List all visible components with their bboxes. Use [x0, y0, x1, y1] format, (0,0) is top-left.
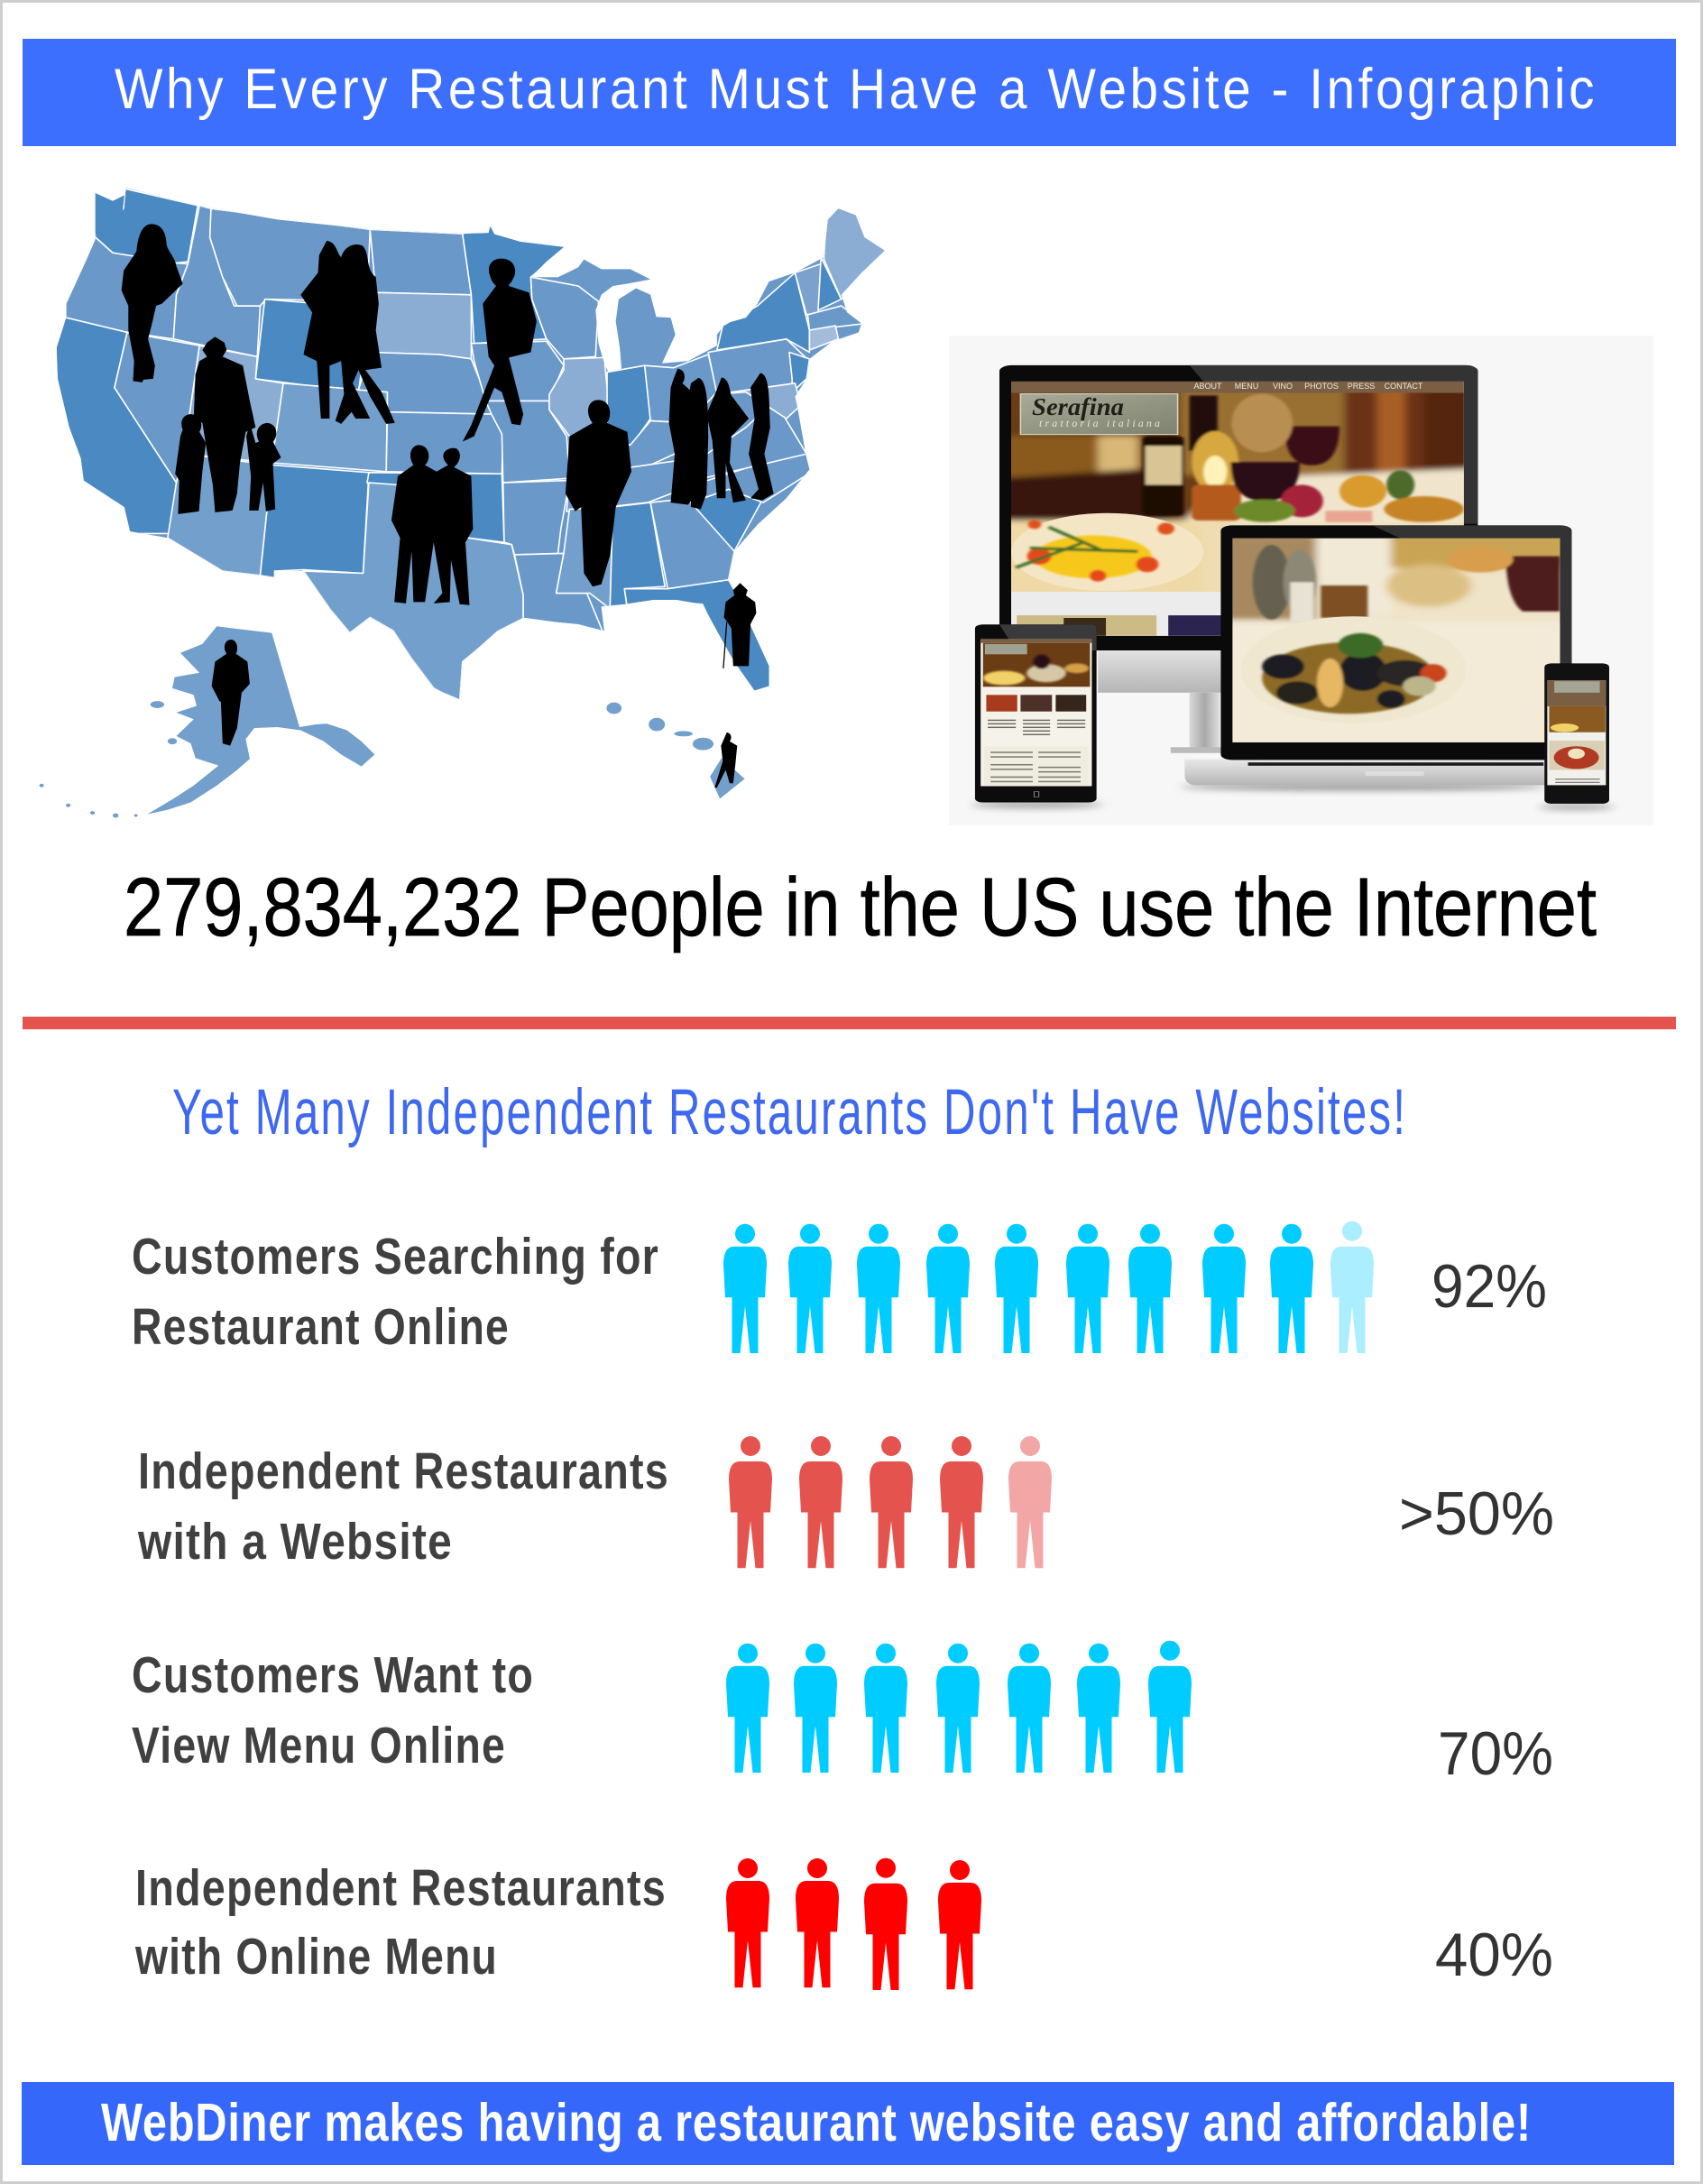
value: 92% [1431, 1252, 1547, 1321]
silhouette: two men [391, 445, 473, 605]
divider bar [23, 1017, 1676, 1029]
silhouette: walker, Hawaii [714, 733, 737, 788]
responsive devices mockup [962, 364, 1624, 816]
silhouette: woman, Pacific Northwest [122, 224, 183, 382]
monitor nav labels [1193, 382, 1423, 391]
US map with people silhouettes [29, 180, 897, 817]
silhouette: woman walking [463, 259, 537, 441]
footer banner [22, 2082, 1674, 2165]
label: View Menu Online [132, 1717, 506, 1774]
restaurant logo text: trattoria italiana [1039, 417, 1160, 429]
label: Customers Searching for [132, 1228, 659, 1286]
silhouette: group of four, east coast [669, 369, 774, 509]
monitor nav labels: PRESS [1348, 382, 1375, 391]
monitor nav labels: CONTACT [1385, 382, 1423, 391]
silhouette: parent with two children [175, 336, 281, 514]
label: with Online Menu [134, 1928, 498, 1986]
silhouette: two women [300, 241, 395, 424]
silhouette: man, Alaska [212, 640, 250, 746]
label [134, 1859, 667, 1986]
pictogram 40% [726, 1858, 981, 1990]
pictogram 50% [729, 1436, 1052, 1568]
label [137, 1442, 669, 1571]
silhouette: man with cane, Florida [723, 583, 756, 668]
restaurant logo text [1032, 393, 1160, 429]
row: customers searching for restaurant online [132, 1221, 1547, 1356]
value: 70% [1438, 1719, 1553, 1788]
restaurant logo text: Serafina [1032, 393, 1124, 420]
laptop [1180, 525, 1571, 791]
value: 40% [1435, 1921, 1553, 1989]
row: independent restaurants with a website [137, 1436, 1554, 1571]
tablet [971, 624, 1102, 808]
label [132, 1646, 534, 1774]
monitor nav labels: VINO [1273, 382, 1293, 391]
label: with a Website [137, 1513, 453, 1571]
pictogram 92% [723, 1221, 1374, 1353]
value: >50% [1399, 1479, 1554, 1548]
contiguous states [29, 180, 897, 710]
monitor nav labels: PHOTOS [1304, 382, 1339, 391]
title banner [23, 39, 1676, 146]
label: Restaurant Online [132, 1298, 510, 1356]
pictogram 70% [726, 1641, 1192, 1773]
Alaska [147, 626, 374, 815]
monitor nav labels: MENU [1235, 382, 1258, 391]
label [132, 1228, 659, 1356]
Hawaii and small islands [40, 701, 745, 817]
silhouette: man, central [566, 400, 631, 586]
row: independent restaurants with online menu [134, 1858, 1553, 1990]
mockup background [949, 336, 1653, 825]
row: customers want to view menu online [132, 1641, 1553, 1788]
label: Independent Restaurants [135, 1859, 667, 1917]
monitor nav labels: ABOUT [1193, 382, 1222, 391]
desktop monitor [997, 365, 1477, 753]
label: Independent Restaurants [138, 1442, 669, 1500]
phone [1539, 663, 1614, 810]
label: Customers Want to [132, 1646, 534, 1704]
